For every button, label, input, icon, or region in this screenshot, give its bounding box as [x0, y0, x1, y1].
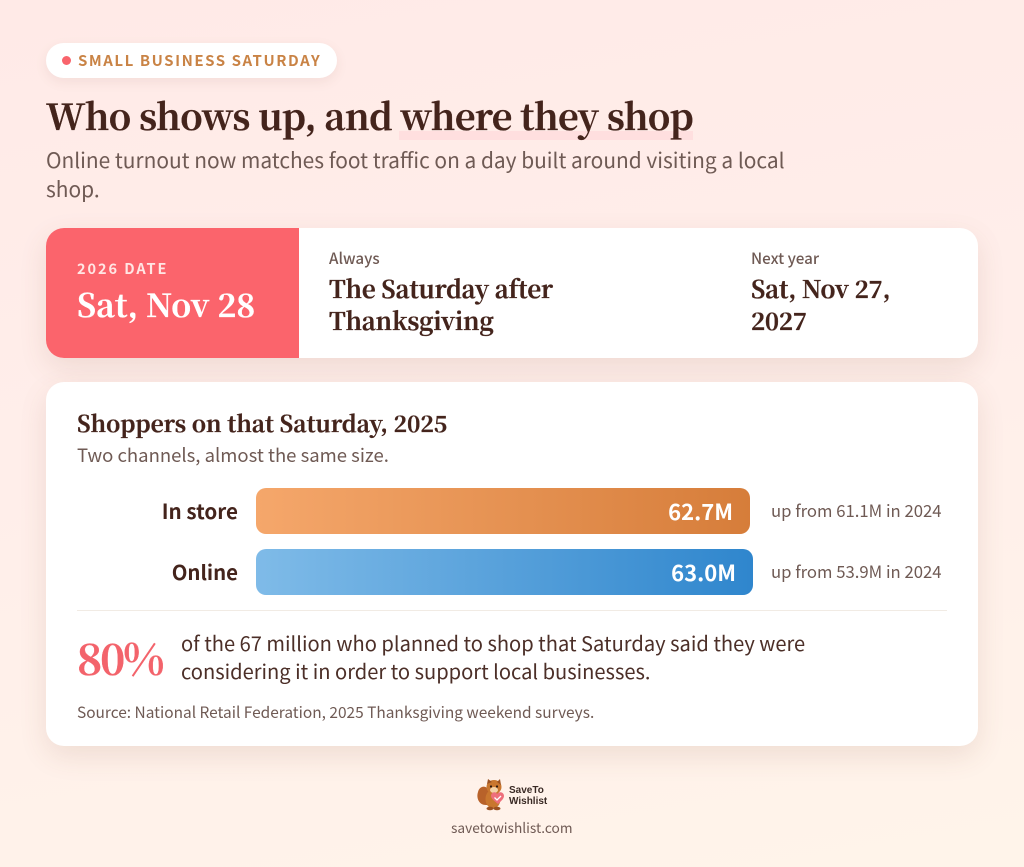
pill label: SMALL BUSINESS SATURDAY	[78, 50, 321, 71]
date label: 2026 DATE	[77, 258, 168, 279]
panel subheading: Two channels, almost the same size.	[77, 442, 389, 468]
pill dot	[62, 56, 71, 65]
date value: Sat, Nov 28	[77, 281, 255, 327]
source: Source: National Retail Federation, 2025 Thanksgiving weekend surveys.	[77, 701, 594, 723]
next year value: Sat, Nov 27,	[751, 270, 890, 305]
panel: dates	[46, 228, 978, 358]
logo wordmark: SaveTo	[509, 785, 544, 796]
subtitle: shop.	[46, 174, 100, 204]
eyebrow pill	[46, 43, 337, 78]
next year value	[751, 270, 890, 337]
in store bar	[256, 488, 750, 534]
icon: squirrel with heart	[477, 779, 504, 810]
callout text: of the 67 million who planned to shop that Saturday said they were	[181, 628, 805, 657]
panel: 2026 date	[46, 228, 299, 358]
callout	[77, 627, 805, 688]
online note: up from 53.9M in 2024	[771, 559, 942, 583]
logo wordmark: Wishlist	[509, 796, 547, 806]
logo wordmark	[509, 785, 548, 806]
always value	[329, 270, 554, 337]
panel heading: Shoppers on that Saturday, 2025	[77, 406, 447, 439]
callout text	[181, 628, 805, 685]
in store value: 62.7M	[668, 495, 733, 527]
subtitle	[46, 145, 785, 204]
title: Who shows up, and where they shop	[46, 90, 693, 141]
bar chart	[162, 488, 942, 595]
always value: Thanksgiving	[329, 302, 494, 337]
callout text: considering it in order to support local businesses.	[181, 656, 650, 685]
logo	[477, 779, 548, 810]
next year label: Next year	[751, 247, 819, 269]
subtitle: Online turnout now matches foot traffic on a day built around visiting a local	[46, 145, 785, 175]
in store note: up from 61.1M in 2024	[771, 498, 942, 522]
online bar	[256, 549, 753, 595]
always label: Always	[329, 247, 380, 269]
always value: The Saturday after	[329, 270, 553, 305]
online label: Online	[172, 556, 238, 586]
title underline highlight	[399, 131, 693, 140]
website: savetowishlist.com	[451, 817, 573, 837]
panel: shoppers	[46, 382, 978, 746]
online value: 63.0M	[671, 556, 736, 588]
callout percent: 80%	[77, 627, 162, 688]
in store label: In store	[162, 495, 238, 525]
next year value: 2027	[751, 302, 807, 337]
